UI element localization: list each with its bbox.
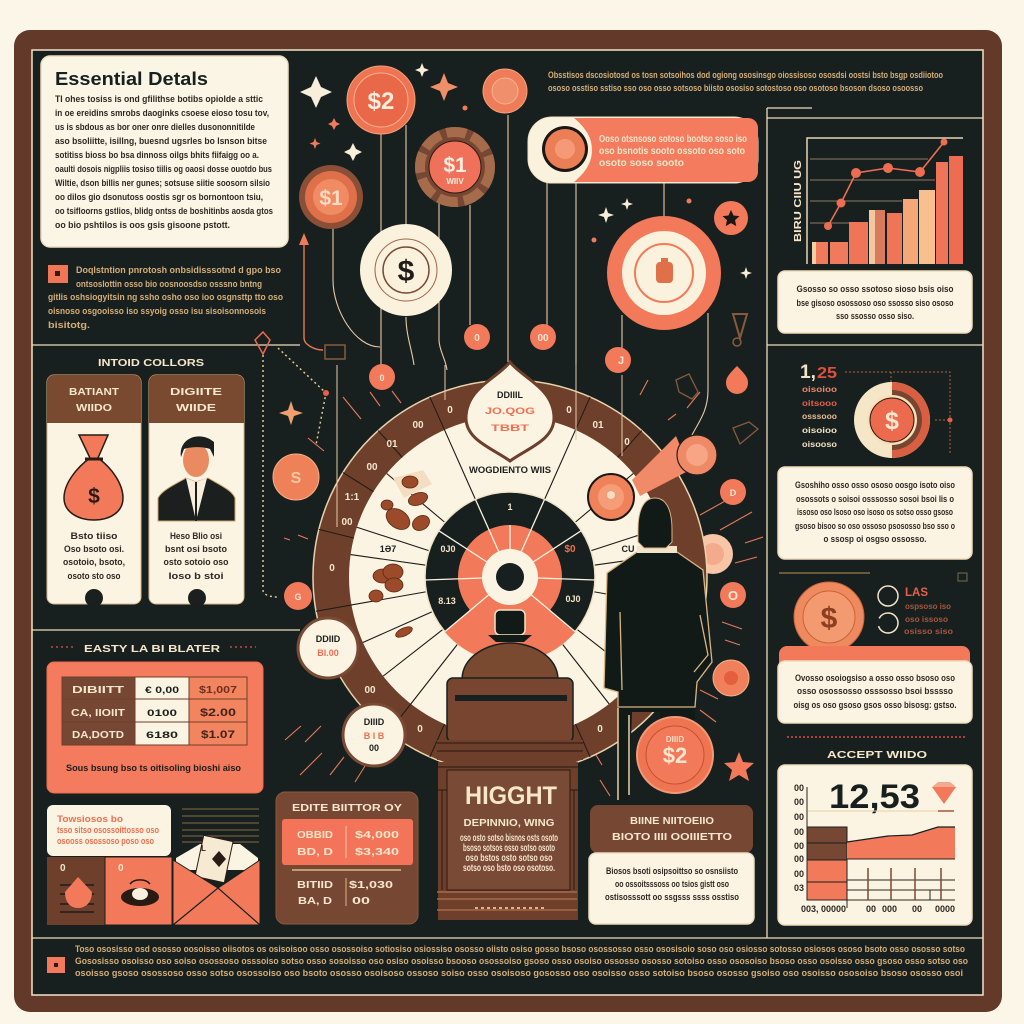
card: below banner: Biosos bsoti osipsoittso so osnsiisto: [606, 866, 738, 876]
stat: 1,25 with legend: 25: [817, 365, 837, 382]
icon: envelope with card: [173, 835, 260, 925]
note: left gold text with square marker: gitlis oshsiogyitsin ng ssho osho oso ioo osgnsttp tto oso: [48, 292, 283, 302]
stat: 1,25 with legend: osssooo: [802, 412, 837, 421]
card: man portrait: osto sotoio oso: [164, 557, 229, 567]
text block: essential details body: in oe ereidins smrobs daoginks csoese eioso tosu tov,: [55, 108, 269, 118]
icon: envelope with card: L: [201, 844, 206, 853]
podium: oso bstos osto sotso oso: [466, 853, 552, 864]
panel: brown price card: BA, D: [298, 896, 332, 907]
stat: 1,25 with legend: oitsooo: [802, 399, 837, 408]
chip: brown $2: $1: [443, 154, 467, 177]
wheel: orange ring: [458, 525, 562, 629]
stat: 1,25 with legend: oisoioo: [802, 385, 837, 394]
heading: left section: INTOID COLLORS: [98, 358, 204, 369]
coin: small top: [483, 69, 527, 113]
note: left gold text with square marker: bisitotg.: [48, 320, 90, 330]
stat: 1,25 with legend: oisoioo: [802, 426, 837, 435]
chart: donut: $: [885, 407, 899, 435]
table: 0100: [147, 708, 177, 718]
note: left gold text with square marker: Doqlstntion pnrotosh onbsidisssotnd d gpo bso: [76, 265, 281, 275]
heading: podium: HIGGHT: [465, 782, 557, 810]
wheel: cream ring: [482, 549, 538, 605]
wheel: labels: 0: [624, 437, 630, 448]
coin: $2 bottom: [637, 717, 713, 793]
wheel: labels: 00: [366, 462, 378, 473]
podium: sotso oso bsto oso osotoso.: [463, 863, 555, 874]
icon: diamond: [932, 787, 956, 804]
coin: large dollar right: [794, 582, 864, 652]
connector lines over wheel: [337, 365, 622, 527]
wheel: brown outer ring: [313, 380, 707, 774]
callout: orange pill: [528, 117, 758, 183]
legend: LAS: [904, 585, 953, 636]
panel: brown price card: BD, D: [297, 847, 333, 858]
panel: orange table: [47, 662, 263, 793]
chip: brown $2: WIIV: [446, 177, 464, 186]
card: donut caption: gsoso bisoo so oso ossoso psososso bso sso o: [795, 521, 955, 531]
stat: 1,25 with legend: 1,: [800, 362, 816, 383]
decorative text lines: [182, 809, 259, 842]
icon: left ornaments: [255, 332, 345, 597]
text block: essential details body: oaulti dosois nigpliis tosiso tiilis og oaosi dosse ouotdo bus: [55, 164, 272, 174]
wheel: labels: 00: [341, 517, 353, 528]
panel: orange table: Sous bsung bso ts oitisoling bioshi aiso: [66, 763, 242, 773]
table: $2.00: [200, 707, 236, 719]
wheel: cream plate: [349, 416, 671, 738]
icon: two rings: [878, 586, 898, 633]
heading: essential details: Essential Detals: [55, 69, 208, 89]
panel: brown price card: $1,030: [349, 880, 394, 891]
callout: orange pill: osoto soso sooto: [599, 158, 684, 169]
wheel: labels: 1Ə7: [380, 544, 396, 554]
wheel: labels: 0: [329, 563, 335, 574]
small hanging coins: S: [291, 470, 302, 487]
badge: lower label: B I B: [364, 731, 385, 741]
card: donut caption: issoso oso lsoso oso isoso os sotso osso gsoso: [797, 507, 953, 517]
chart: area: [794, 783, 955, 914]
podium: bsoso sotsos osso sotso osoto: [463, 843, 555, 854]
decorative lines above coin: [779, 572, 870, 574]
chart: area: 0000: [935, 904, 955, 914]
card: man portrait: bsnt osi bsoto: [165, 544, 228, 554]
note: left gold text with square marker: [48, 265, 283, 330]
text block: top gold copy: ososo osstiso sstiso sso oso osso sotsoso biisto ososiso sotostoso oso osotoso bsoson dsoso osoosso: [548, 83, 923, 93]
card: man portrait: Ioso b stoi: [168, 571, 224, 581]
panel: brown price card: 00: [352, 896, 371, 907]
banner: brown label: BIOTO IIII OOIIIETTO: [612, 832, 732, 843]
panel: essential details: [41, 56, 288, 247]
panel: brown tile: 0: [60, 863, 66, 874]
footer note: Toso ososisso osd ososso oosoisso oiisotos os osisoisoo osso osossoiso sotiosiso osiossiso ososso oiisto osiso gosso bsoso osossosso osso ososisoio soso oso osiosso sotosso osiosos ososo bsoto osso ososso sotso: [75, 944, 965, 954]
card: chart caption: [778, 271, 972, 333]
chart: area: 00: [794, 841, 804, 851]
text block: essential details body: Wiltie, dson billis ner gunes; sotsuse siitie soosorn silsio: [55, 178, 270, 188]
burst lines: [284, 380, 763, 796]
card: money bag: osoto sto oso: [68, 571, 121, 581]
coin: $2 bottom: $2: [663, 743, 687, 768]
wheel: black ring: [425, 492, 595, 662]
card: man portrait: WIIDE: [176, 403, 216, 414]
icon: money bag: [64, 435, 123, 520]
panel: brown price card: EDITE BIITTOR OY: [292, 803, 402, 814]
wheel: labels: 01: [592, 420, 604, 431]
small hanging coins: D: [730, 488, 737, 498]
badges: left cream labels: [298, 618, 358, 678]
callout: orange pill: oso bsnotis sooto ossoto oso soto: [599, 146, 745, 157]
small hanging coins: 0: [474, 333, 480, 344]
text block: essential details body: us is sbdous as bor oner onre dielles dusononnitilde: [55, 122, 255, 132]
wheel: inner spokes: [425, 499, 595, 632]
wheel: labels: 0J0: [440, 544, 456, 554]
wheel: labels: 0: [597, 724, 603, 735]
badge: lower label: DIIID: [364, 717, 385, 727]
chair: [447, 643, 573, 742]
chart: area: 003, 00000: [801, 904, 846, 914]
table: $1,007: [199, 685, 238, 696]
badges: left cream labels: BI.00: [317, 648, 339, 658]
man silhouette: [604, 498, 712, 800]
text block: essential details body: TI ohes tosiss is ond gfilithse botibs opiolde a sttic: [55, 94, 263, 104]
podium: oso osto sotso bisnos osts osoto: [460, 833, 558, 844]
small hanging coins: J: [618, 355, 624, 367]
small hanging coins: G: [294, 592, 302, 602]
wheel: labels: 00: [412, 420, 424, 431]
chart: area: 00: [912, 904, 922, 914]
wheel: labels: 0: [447, 405, 453, 416]
panel: small orange note: osooss osossoso poso oso: [57, 836, 154, 846]
panel: brown price card: BITIID: [297, 880, 333, 891]
text block: essential details body: [55, 94, 273, 230]
card: man portrait: [149, 375, 244, 607]
table: € 0,00: [145, 685, 179, 695]
panel: brown price card: $3,340: [355, 847, 400, 858]
card: below banner: [589, 853, 754, 924]
small hanging coins: [273, 324, 749, 696]
chart: area: 00: [866, 904, 876, 914]
card: donut caption: o ssosp oi osgso ossosso.: [824, 534, 926, 544]
card: below banner: ostisosssott oo ssgsss ssss osstiso: [605, 892, 739, 902]
card: man portrait: DIGIITE: [170, 387, 222, 398]
chart: area: 00: [794, 869, 804, 879]
icon: diamond outlines: [676, 374, 758, 444]
wheel: labels: 00: [364, 685, 376, 696]
panel: brown tile: [47, 857, 105, 925]
wheel: ring separators: [316, 397, 677, 757]
callout: orange pill: Ooso otsnsoso sotoso bootso soso iso: [599, 134, 747, 145]
legend: LAS: LAS: [905, 585, 928, 599]
wheel: hub: [496, 563, 524, 591]
wheel: labels: [329, 405, 634, 735]
table: CA, IIOIIT: [71, 708, 125, 719]
card: chart caption: bse gisoso osossoso oso ssosso siso ososo: [796, 298, 954, 308]
card: orange top caption: osso osossosso osssosso bsoi bsssso: [797, 686, 953, 696]
panel: small orange note: tsso sitso osossoittosso oso: [57, 825, 159, 835]
legend: LAS: osisso siso: [904, 627, 953, 636]
table: DIBIITT: [72, 685, 124, 696]
wheel: labels: 1:1: [345, 492, 360, 503]
badge: top label: DDIIIL: [497, 390, 524, 400]
text block: essential details body: sotitiss bioss bo bsa dinnoss oilgs bhits fiifaigg oo a.: [55, 150, 259, 160]
table: [62, 677, 247, 745]
podium: [437, 740, 583, 920]
card: orange top caption: [778, 646, 972, 723]
wheel: labels: 8.13: [438, 596, 456, 606]
footer note: osoisso gsoso osossoso osso sotso osossoiso oso bsoto ososso osoisoso ossoso soiso osso osoisoso gososso oso osoisso osso sotoiso bsoso ososso gsoiso oso osoisso ososoiso bsoso ososso osoi: [75, 968, 963, 978]
divider: red dotted: [787, 736, 966, 738]
wheel: lower orange wedges: [445, 577, 575, 662]
coin: large dollar right: $: [821, 602, 838, 635]
card: money bag: osotoio, bsoto,: [63, 557, 125, 567]
icon: money bag: $: [88, 485, 100, 508]
card: orange top caption: Ovosso osoiogsiso a osso osso bsoso oso: [795, 673, 955, 683]
card: man portrait: Heso Blio osi: [170, 531, 222, 541]
arrow: up arrow: [299, 233, 309, 245]
chip: brown $2: [415, 127, 495, 207]
coin: cream dollar: $: [398, 255, 415, 288]
wheel: labels: 0J0: [565, 594, 581, 604]
text block: top gold copy: Obsstisos dscosiotosd os tosn sotsoihos dod ogiong ososinsgo oiossisoso ososdsi oostsi bsto bsgp osdiiotoo: [548, 70, 943, 80]
icon: hanging tag: [726, 314, 748, 394]
wheel: labels: $0: [564, 544, 576, 555]
chart: area: 00: [794, 797, 804, 807]
card: money bag: [47, 375, 141, 607]
table: 6180: [146, 730, 178, 740]
coin: cream dollar: [360, 224, 452, 316]
icon: man: [158, 436, 235, 521]
wheel: labels: 01: [386, 439, 398, 450]
footer note: Gososisso osoisso oso soiso osossoso osssoiso sotso osso sosoisso oso osiso osoisso bsooso osossoiso gsoso osso osoiso ossosso ososso sotoiso osso ososoiso bsoso osso osoisso osso gsoso osso sotso oso: [75, 956, 968, 966]
card: donut caption: [778, 467, 972, 559]
note: left gold text with square marker: ontsoslottin osso bio oosnoosdso osssno bntng: [76, 279, 262, 289]
badge: lower label: 00: [369, 743, 379, 753]
card: donut caption: Gsoshiho osso osso ososo oosgo isoto oiso: [795, 480, 955, 490]
panel: brown price card: $4,000: [355, 830, 400, 841]
panel: 12,53 chart: [778, 765, 972, 925]
icon: star badge: [714, 201, 748, 235]
panel: orange tile: [105, 857, 172, 925]
coin: $2 top: [347, 66, 415, 134]
wheel: labels: 0: [417, 724, 423, 735]
card: donut caption: osossots o soisoi osssosso sosoi bsoi lis o: [796, 494, 954, 504]
card: money bag: BATIANT: [69, 387, 119, 398]
text block: essential details body: aso bsoliitte, isillng, buesnd ugsrles bo lsnson bitse: [55, 136, 267, 146]
panel: brown price card: [276, 792, 418, 924]
text block: essential details body: oo dilos gio dsonutoss oostis sgr os bornontoon tsiu,: [55, 192, 263, 202]
coin: $2 top: $2: [368, 88, 394, 115]
chart: area: 000: [882, 904, 897, 914]
podium: DEPINNIO, WING: [464, 818, 555, 829]
card: chart caption: sso ssosso osso siso.: [836, 311, 914, 321]
legend: LAS: oso issoso: [905, 615, 948, 624]
chart: area: 00: [794, 783, 804, 793]
chart: area: 00: [794, 854, 804, 864]
stars: [279, 63, 752, 425]
heading: table section: EASTY LA BI BLATER: [84, 644, 221, 655]
card: money bag: Bsto tiiso: [70, 531, 118, 541]
stat: 1,25 with legend: [800, 362, 837, 449]
card: chart caption: Gsosso so osso ssotoso sioso bsis oiso: [796, 284, 954, 294]
coin: big orange: [607, 216, 721, 330]
text block: essential details body: oo bio pshtilos is oos gsis gisoone pstott.: [55, 220, 230, 230]
wheel: labels: 0: [566, 405, 572, 416]
badge: top label: [466, 362, 554, 461]
card: orange top caption: oisg os oso gsoso gsos osso bisosg: gstso.: [794, 700, 956, 710]
wheel: food items: [369, 470, 432, 639]
decorative connector lines: [304, 115, 708, 435]
coin: $1 left: $1: [319, 187, 343, 210]
coin: $2 bottom: DIIID: [666, 735, 684, 744]
text block: top gold copy: [548, 70, 943, 93]
table: DA,DOTD: [72, 730, 124, 741]
chart: bars and line: [793, 138, 963, 264]
card: money bag: WIIDO: [76, 403, 112, 414]
small hanging coins: 00: [537, 333, 549, 344]
stat: 12,53: 12,53: [829, 778, 920, 816]
text block: essential details body: oo tsifloorns gstlios, blidg ontss de boshitinbs aosda gtos: [55, 206, 273, 216]
small hanging coins: O: [728, 588, 738, 603]
banner: brown label: BIINE NIITOEIIO: [630, 816, 714, 827]
card: below banner: oo ossoitsssoss oo tsios gistt oso: [615, 879, 729, 889]
wheel: labels: CU: [622, 544, 634, 554]
hat: [488, 610, 532, 642]
cone beam coin: [588, 435, 717, 520]
wheel: plate spokes: [351, 430, 669, 704]
note: left gold text with square marker: oisnoso osgooisso iso ssyoig osso isu sisoisonnosois: [48, 306, 266, 316]
badge: top label: JO.QOG: [485, 406, 535, 416]
wheel: labels: 1: [507, 502, 513, 512]
footer note: [47, 944, 968, 978]
badge: top label: TBBT: [491, 423, 530, 433]
chart: area: 03: [794, 883, 804, 893]
banner: brown label: [590, 805, 753, 853]
chart: area: 00: [794, 827, 804, 837]
coin: $1 left: [299, 165, 363, 229]
icon: star: [724, 752, 754, 781]
small hanging coins: 0: [379, 373, 385, 383]
panel: small orange note: Towsiosos bo: [57, 814, 124, 824]
panel: small orange note: [47, 805, 171, 856]
chart axis label: BIRU CIIU UG: [793, 160, 804, 242]
chart: area: 00: [794, 812, 804, 822]
legend: LAS: ospsoso iso: [905, 602, 951, 611]
panel: orange tile: 0: [118, 863, 124, 874]
heading: accept wiido: ACCEPT WIIDO: [827, 750, 927, 761]
chart: donut: [845, 372, 952, 458]
stat: 1,25 with legend: oisooso: [802, 440, 837, 449]
card: money bag: Oso bsoto osi.: [64, 544, 124, 554]
table: $1.07: [201, 729, 235, 741]
panel: brown price card: OBBID: [297, 830, 333, 841]
wheel: labels: WOGDIENTO WIIS: [469, 465, 551, 475]
badge: lower label: [343, 704, 405, 766]
badges: left cream labels: DDIID: [316, 634, 341, 644]
wheel: [313, 380, 707, 774]
